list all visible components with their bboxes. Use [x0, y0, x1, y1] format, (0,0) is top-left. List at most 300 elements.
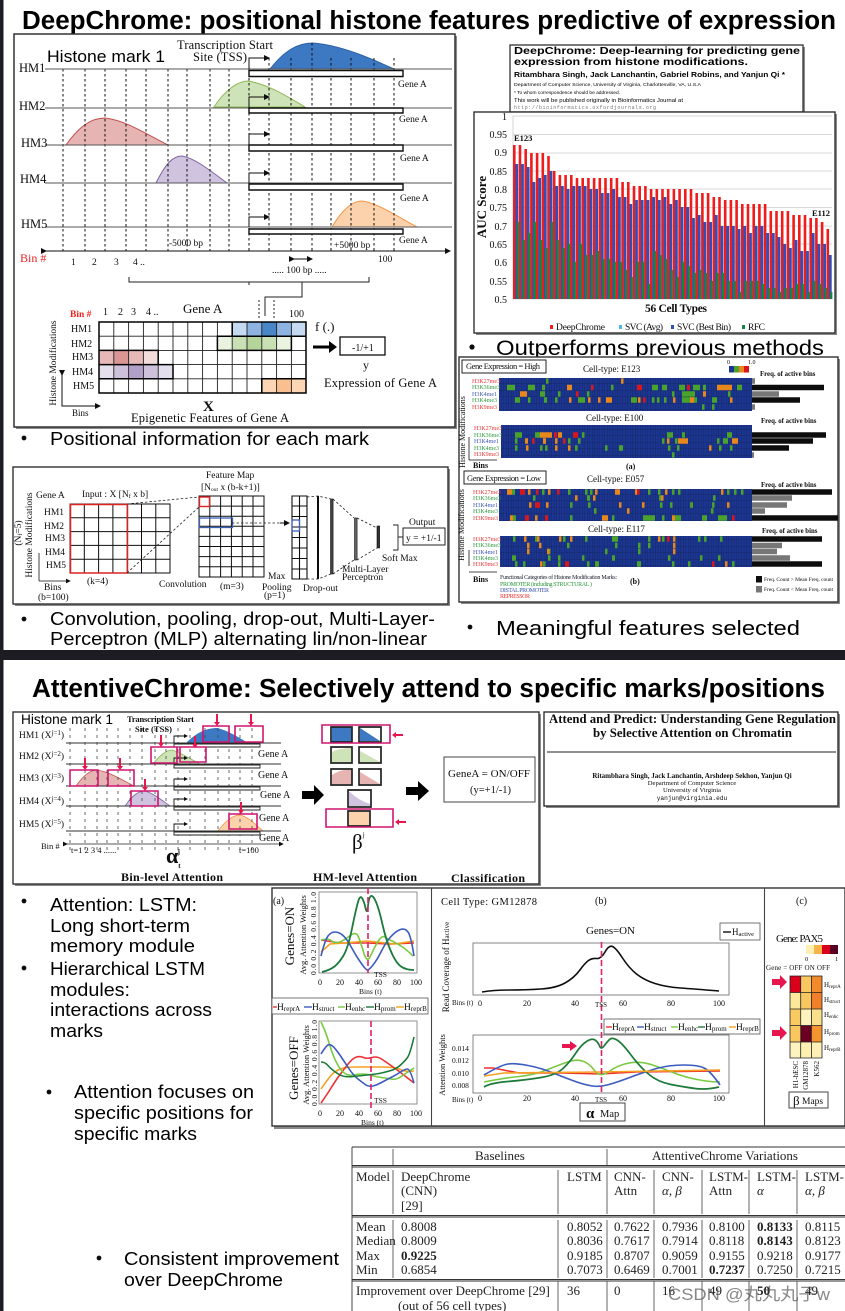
frequency legend: [756, 576, 833, 593]
y axis title: AUC Score: [474, 176, 489, 238]
matrix labels: Gene A: [183, 301, 223, 316]
row labels: E123: H3K4me1: [472, 392, 497, 398]
CNN labels: Pooling: [262, 583, 292, 593]
bin axis labels: 2: [92, 258, 97, 268]
functional category legend: PROMOTER (including STRUCTURAL ): [500, 581, 592, 588]
label: TSS: Transcription Start: [177, 38, 274, 52]
cell labels: E112: [812, 208, 830, 218]
heatmap: E117: [500, 536, 752, 567]
(b) mark legend: H: [678, 1023, 685, 1033]
(b) mark legend: reprB: [743, 1025, 759, 1033]
bin axis labels: 3: [114, 258, 119, 268]
functional category legend: [500, 574, 617, 600]
frequency titles: Freq. of active bins: [761, 418, 817, 425]
table row: mean: [356, 1219, 840, 1234]
heatmap: E057: [499, 489, 752, 521]
table row: max: 0.9059: [662, 1248, 698, 1263]
cell-type titles: Cell-type: E117: [588, 524, 645, 534]
cell-type titles: [583, 364, 645, 534]
(a) text: 20: [336, 1109, 344, 1118]
(a) legend: struct: [319, 1005, 334, 1013]
row labels: E100: H3K4me3: [474, 446, 499, 452]
stage captions: HM-level Attention: [313, 870, 417, 884]
(a) text: 0: [318, 1109, 322, 1118]
gene labels: Gene A: [400, 194, 429, 204]
bullets: hierarchical lstm: interactions across: [50, 999, 212, 1020]
bin axis labels: +5000 bp: [334, 241, 370, 251]
dashed bin lines: [70, 728, 252, 850]
HM labels: j=2: [50, 750, 61, 758]
(a) text: Avg. Attention Weights: [298, 895, 308, 975]
(b) mark legend: H: [612, 1023, 619, 1033]
table header: AttentiveChrome Variations: [652, 1148, 798, 1163]
table row: max: 0.9185: [567, 1248, 603, 1263]
(c) text: H: [824, 1028, 829, 1036]
(c) text: K562: [813, 1061, 821, 1077]
bullets: attention lstm: Long short-term: [50, 915, 190, 936]
authors: [592, 772, 792, 802]
panel: paper card DeepChrome: http://bioinformatics.oxfordjournals.org: [514, 105, 656, 111]
signal peak: HM3: [66, 118, 168, 145]
(a) text: 20: [336, 978, 344, 987]
dashed bin lines: [63, 43, 394, 252]
bullets: attention lstm: Attention: LSTM:: [50, 894, 197, 915]
table header: DeepChrome: [401, 1169, 471, 1184]
TSS arrows: [174, 734, 188, 831]
CNN labels: Feature Map: [206, 471, 255, 481]
(a) genes off plot: [319, 1021, 417, 1108]
row labels: E057: H3K4me3: [473, 509, 498, 515]
row labels: E057: [473, 490, 501, 522]
bullets: hierarchical lstm: Hierarchical LSTM: [50, 958, 205, 979]
(a) legend: prom: [381, 1005, 396, 1013]
table row: min: 0.7215: [805, 1262, 841, 1277]
HM labels: ): [61, 796, 64, 807]
title: AttentiveChrome: AttentiveChrome: Selectively attend to specific marks/positions: [32, 675, 825, 703]
section divider band: [0, 650, 845, 660]
matrix caption: Epigenetic Features of Gene A: [131, 411, 289, 425]
axis labels and arrows: Bins: [473, 575, 488, 584]
alpha map tag: [580, 1103, 625, 1122]
table row: improvement: 0: [614, 1283, 620, 1298]
table row: median: 0.8123: [805, 1233, 841, 1248]
matrix row HM3: [99, 350, 158, 365]
(b) text: 0.010: [452, 1069, 469, 1078]
track labels: HM4: [20, 172, 47, 186]
(a) text: 40: [355, 978, 363, 987]
stage captions: Classification: [451, 871, 525, 885]
table row: median: 0.8009: [401, 1233, 437, 1248]
(a) text: 100: [410, 978, 422, 987]
left edge bar: [0, 0, 4, 1311]
table row: min: Min: [356, 1262, 378, 1277]
table header: Attn: [709, 1183, 733, 1198]
panel: positional histone figure: [14, 34, 457, 429]
bullets: hierarchical lstm: modules:: [50, 979, 130, 1000]
matrix labels: HM3: [72, 352, 93, 363]
TSS arrows: [249, 55, 270, 227]
beta maps tag: Maps: [802, 1097, 823, 1107]
table row: min: 0.7237: [709, 1262, 745, 1277]
dashed connectors: [127, 496, 377, 579]
gene expression high tag: [462, 360, 546, 373]
bin axis: t=1 2 3 4 ......: [71, 845, 116, 855]
bars: SVC best bin: [517, 164, 830, 299]
attention peaks: [76, 728, 263, 831]
beta attention cells: [322, 725, 406, 827]
feature matrix: [99, 322, 306, 393]
(a) text: 80: [393, 978, 401, 987]
axis labels and arrows: (b): [630, 577, 640, 586]
CNN labels: Soft Max: [382, 553, 418, 564]
matrix caption: X: [203, 399, 214, 415]
table row: max: 0.9225: [401, 1248, 437, 1263]
gene labels: Gene A: [399, 115, 428, 125]
track labels: HM1: [19, 61, 45, 75]
table row: min: [356, 1262, 841, 1277]
row labels: E100: H3K36me3: [474, 433, 502, 439]
CNN labels: [36, 471, 418, 603]
bullet: meaningful features: Meaningful features selected: [496, 618, 800, 640]
panel: paper card DeepChrome: expression from histone modifications.: [514, 57, 748, 68]
dropout and MLP layers: [317, 496, 380, 579]
bin axis: Bin #: [41, 841, 60, 851]
output bracket and box: [393, 518, 445, 550]
panel: paper card DeepChrome: This work will be published originally in Bioinformatics Journal at: [514, 98, 684, 104]
table header: LSTM-: [709, 1169, 748, 1184]
label: TSS: [177, 38, 274, 64]
cell-type titles: Cell-type: E057: [587, 474, 645, 484]
(a) text: 60: [374, 1109, 382, 1118]
table row: improvement: 36: [567, 1283, 580, 1298]
(c) text: (c): [796, 896, 807, 907]
output bracket and box: Output: [409, 518, 436, 528]
dashed cell marker: [259, 300, 274, 320]
CNN labels: Gene A: [36, 491, 65, 501]
table header: α: [757, 1183, 765, 1198]
(b) mark legend: H: [644, 1023, 651, 1033]
red attention arrows: [82, 714, 254, 814]
table header: Model: [356, 1169, 390, 1184]
arrow to pooling: [280, 522, 289, 524]
(c) heat map: [790, 976, 822, 1058]
gene boxes: [249, 70, 403, 234]
panel: paper card DeepChrome: [510, 45, 805, 114]
y axis ticks: 0.7: [494, 222, 507, 233]
row labels: E123: H3K27me3: [472, 379, 500, 385]
row labels: E100: H3K4me1: [474, 439, 499, 445]
(a) legend: reprB: [411, 1005, 427, 1013]
matrix labels: 100: [289, 309, 304, 320]
table row: max: Max: [356, 1248, 380, 1263]
alpha symbol: j: [177, 848, 180, 856]
CNN labels: HM5: [46, 561, 66, 571]
(c) text: H: [824, 996, 829, 1004]
(b) attention plot: [473, 1035, 729, 1093]
cell-type titles: Cell-type: E100: [586, 413, 644, 423]
HM labels: j=4: [50, 795, 61, 803]
bin axis labels: 1: [71, 258, 76, 268]
y axis ticks: 0.65: [490, 240, 507, 251]
bullet: consistent improvement: [97, 1248, 340, 1290]
matrix row HM2: [217, 336, 291, 350]
alpha symbol: t: [178, 862, 181, 870]
HM labels: ): [61, 773, 64, 784]
axis labels: [13, 492, 70, 581]
HM labels: HM5 (X: [19, 820, 51, 830]
(a) text: 100: [410, 1109, 422, 1118]
bullet: positional information: Positional information for each mark: [50, 428, 370, 449]
axis labels: (N: [14, 536, 24, 546]
gene A labels: [258, 749, 291, 844]
table row: mean: 0.7936: [662, 1219, 698, 1234]
bin axis labels: [20, 239, 392, 276]
y axis ticks: 0.55: [490, 277, 507, 288]
(a) legend: [272, 998, 428, 1014]
(a) text: 0.0 0.2 0.4 0.6 0.8 1.0: [309, 892, 318, 975]
table header: LSTM-: [757, 1169, 796, 1184]
(c) text: prom: [829, 1032, 840, 1037]
matrix labels: 2: [118, 307, 123, 318]
(b) text: TSS: [595, 1001, 607, 1009]
pooling highlight: [292, 520, 300, 531]
HM labels: HM4 (X: [19, 797, 51, 807]
authors: Department of Computer Science: [648, 780, 736, 787]
table row: improvement: 16: [662, 1283, 676, 1298]
CNN labels: (p=1): [264, 590, 285, 601]
gene labels: [398, 80, 429, 246]
frequency bars: [752, 381, 838, 564]
stage captions: Bin-level Attention: [121, 870, 223, 884]
(b) text: 60: [619, 999, 627, 1008]
(a) legend: H: [312, 1003, 319, 1013]
legend: SVC (Avg): [625, 322, 663, 333]
(c) text: reprA: [829, 985, 841, 990]
signal peak: HM4: [156, 156, 227, 183]
bin axis labels: 4 ..: [133, 258, 145, 268]
bullet: attention focuses: Attention focuses on: [74, 1081, 254, 1102]
(c) colour bar: 0: [805, 956, 808, 963]
table row: min: 0.7250: [757, 1262, 793, 1277]
(a) text: 60: [374, 978, 382, 987]
y axis ticks: 0.6: [494, 258, 507, 269]
CNN labels: (b=100): [38, 592, 69, 603]
row labels: E117: H3K27me3: [473, 537, 501, 543]
matrix caption: [131, 399, 289, 425]
(b) mark legend: H: [705, 1023, 712, 1033]
table header: [29]: [401, 1198, 423, 1213]
table rules: [352, 1147, 845, 1311]
bullet: outperforms previous methods: Outperforms previous methods: [496, 336, 824, 360]
axis labels and arrows: Bins: [473, 461, 488, 470]
(c) text: Gene: PAX5: [776, 933, 824, 945]
axis labels and arrows: (a): [626, 462, 636, 471]
CNN labels: (k=4): [87, 576, 108, 587]
bullet: consistent improvement: Consistent improvement: [124, 1248, 340, 1269]
(c) colour bar: 1: [835, 956, 838, 963]
axis labels and arrows: Histone Modifications: [457, 489, 466, 561]
HM labels: ): [61, 819, 64, 830]
y axis ticks: 0.95: [490, 130, 507, 141]
blue highlight row: [200, 518, 232, 528]
table row: mean: Mean: [356, 1219, 386, 1234]
(b) text: Read Coverage of Hactive: [441, 922, 451, 1012]
beta symbol: j: [362, 831, 365, 839]
CNN labels: HM4: [45, 548, 65, 558]
gene labels: Gene A: [400, 154, 429, 164]
frequency titles: Freq. of active bins: [760, 371, 816, 378]
output bracket and box: y = +1/-1: [406, 534, 442, 544]
signal peak: HM1: [270, 43, 394, 69]
panel: AUC bar chart: [474, 112, 837, 335]
bullets: hierarchical lstm: [22, 958, 212, 1041]
paper subtitle: by Selective Attention on Chromatin: [593, 726, 792, 740]
row labels: E123: H3K4me3: [472, 398, 497, 404]
row labels: E117: [473, 537, 501, 568]
stage captions: [121, 870, 525, 885]
(b) Hactive legend: [720, 923, 760, 940]
matrix labels: 3: [131, 307, 136, 318]
(b) text: Attention Weights: [437, 1034, 447, 1096]
table row: mean: 0.8052: [567, 1219, 603, 1234]
CNN labels: HM2: [44, 522, 64, 532]
table row: max: [356, 1248, 841, 1263]
(a) text: [273, 892, 422, 1127]
y axis ticks: [490, 112, 507, 306]
classification box: GeneA = ON/OFF: [448, 768, 530, 780]
panel: heatmap figure: [457, 357, 840, 604]
(b) mark legend: enhc: [685, 1025, 698, 1033]
table row: max: 0.9155: [709, 1248, 745, 1263]
bullet: convolution description: Perceptron (MLP) alternating lin/non-linear: [50, 628, 427, 649]
row labels: E100: H3K9me3: [474, 452, 499, 458]
table row: median: Median: [356, 1233, 396, 1248]
HM labels: HM3 (X: [19, 774, 51, 784]
CNN labels: [N: [201, 483, 211, 493]
legend: [550, 322, 765, 333]
CNN labels: x (b-k+1)]: [218, 482, 260, 493]
gridlines: [513, 116, 832, 299]
function arrow and output: f (.): [315, 319, 334, 334]
CNN labels: Max: [268, 572, 286, 582]
y axis ticks: 0.8: [494, 185, 507, 196]
column rules: [393, 1149, 797, 1311]
colour scale: [727, 360, 756, 372]
functional category legend: DISTAL PROMOTER: [500, 588, 549, 594]
(b) mark legend: [604, 1019, 760, 1034]
(a) legend: H: [345, 1003, 352, 1013]
colour scale: 0: [727, 360, 730, 366]
bullet: attention focuses: specific positions for: [74, 1102, 253, 1123]
matrix labels: 1: [103, 307, 108, 318]
bullet: attention focuses: [47, 1081, 254, 1144]
legend: RFC: [748, 323, 765, 333]
table row: mean: 0.8133: [757, 1219, 793, 1234]
(b) text: Bins (t): [452, 999, 474, 1007]
table header: CNN-: [662, 1169, 694, 1184]
function arrow and output: -1/+1: [352, 343, 374, 354]
table row: median: 0.7617: [614, 1233, 650, 1248]
(c) text: H: [824, 981, 829, 989]
functional category legend: Functional Categories of Histone Modification Marks:: [500, 574, 617, 581]
HM labels: ): [61, 730, 64, 741]
table row: improvement: [356, 1283, 818, 1311]
gene A labels: Gene A: [259, 813, 290, 824]
table row: min: 0.6469: [614, 1262, 650, 1277]
(b) text: (b): [595, 896, 607, 907]
(b) text: 0: [478, 1094, 482, 1103]
CNN labels: out: [211, 487, 219, 493]
(b) text: 0.012: [452, 1056, 469, 1065]
axis labels: Histone Modifications: [24, 492, 35, 578]
(a) text: Bins (t): [359, 987, 382, 996]
gene boxes: [174, 744, 260, 835]
(a) text: (a): [273, 896, 284, 907]
bullets: hierarchical lstm: marks: [50, 1020, 103, 1041]
beta symbol: β: [352, 830, 363, 854]
(b) coverage plot: [473, 943, 729, 995]
(b) mark legend: reprA: [619, 1025, 635, 1033]
(a) text: 0: [318, 978, 322, 987]
(c) text: H: [824, 1011, 829, 1019]
table header: Baselines: [475, 1148, 525, 1163]
row labels: E123: H3K36me3: [472, 385, 500, 391]
(b) text: 80: [667, 1094, 675, 1103]
x axis title: 56 Cell Types: [645, 303, 708, 315]
matrix row HM1: [232, 322, 306, 336]
track lines and gene boxes: [66, 743, 281, 831]
legend: DeepChrome: [556, 323, 605, 333]
(a) genes on plot: [319, 888, 417, 973]
(a) text: 80: [393, 1109, 401, 1118]
HM labels: j=3: [50, 772, 61, 780]
gene expression low tag: [464, 471, 546, 484]
heatmap: E123: [499, 378, 752, 411]
row labels: E057: H3K36me3: [473, 496, 501, 502]
table row: max: 0.9218: [757, 1248, 793, 1263]
CNN labels: HM3: [45, 534, 65, 544]
CNN labels: Multi-Layer: [342, 565, 389, 575]
table header: [356, 1148, 844, 1213]
CNN labels: (m=3): [220, 581, 244, 592]
TSS label: Transcription Start: [127, 714, 194, 724]
matrix row HM4: [99, 365, 173, 379]
(a) text: 0.0 0.2 0.4 0.6 0.8 1.0: [310, 1020, 319, 1106]
row labels: E123: [472, 379, 500, 411]
(b) text: 20: [523, 999, 531, 1008]
(c) text: enhc: [829, 1015, 839, 1020]
TSS label: Site (TSS): [135, 724, 172, 734]
table row: median: 0.8118: [709, 1233, 744, 1248]
(c) colour bar: [805, 945, 838, 963]
table header: CNN-: [614, 1169, 646, 1184]
(b) text: 0: [478, 999, 482, 1008]
(b) text: Bins (t): [452, 1096, 474, 1104]
table row: improvement: 49: [709, 1283, 722, 1298]
input grid: [70, 504, 170, 573]
table row: median: 0.8036: [567, 1233, 603, 1248]
matrix labels: HM4: [72, 367, 93, 378]
(c) text: GM12878: [802, 1061, 810, 1090]
bin axis: [46, 250, 450, 252]
bin axis: [41, 841, 283, 855]
panel: paper card AttentiveChrome: [544, 712, 840, 808]
(b) text: 100: [713, 999, 725, 1008]
label: histone mark 1: Histone mark 1: [47, 48, 165, 66]
y axis ticks: 0.85: [490, 167, 507, 178]
alpha map tag: Map: [600, 1109, 619, 1120]
(b) text: 40: [571, 1094, 579, 1103]
